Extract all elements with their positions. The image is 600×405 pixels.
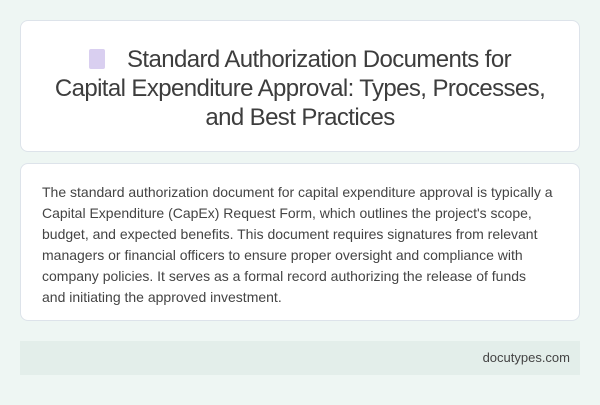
title card <box>20 20 580 152</box>
description card <box>20 163 580 321</box>
footer <box>20 341 580 375</box>
footer text: docutypes.com <box>483 350 570 365</box>
icon: document <box>89 49 105 69</box>
title: Standard Authorization Documents for Capital Expenditure Approval: Types, Processes, and Best Practices <box>55 46 545 131</box>
description text: The standard authorization document for capital expenditure approval is typically a Capital Expenditure (CapEx) Request Form, which outlines the project's scope, budget, and expected benefits. This document requires signatures from relevant managers or financial officers to ensure proper oversight and compliance with company policies. It serves as a formal record authorizing the release of funds and initiating the approved investment. <box>42 184 553 305</box>
